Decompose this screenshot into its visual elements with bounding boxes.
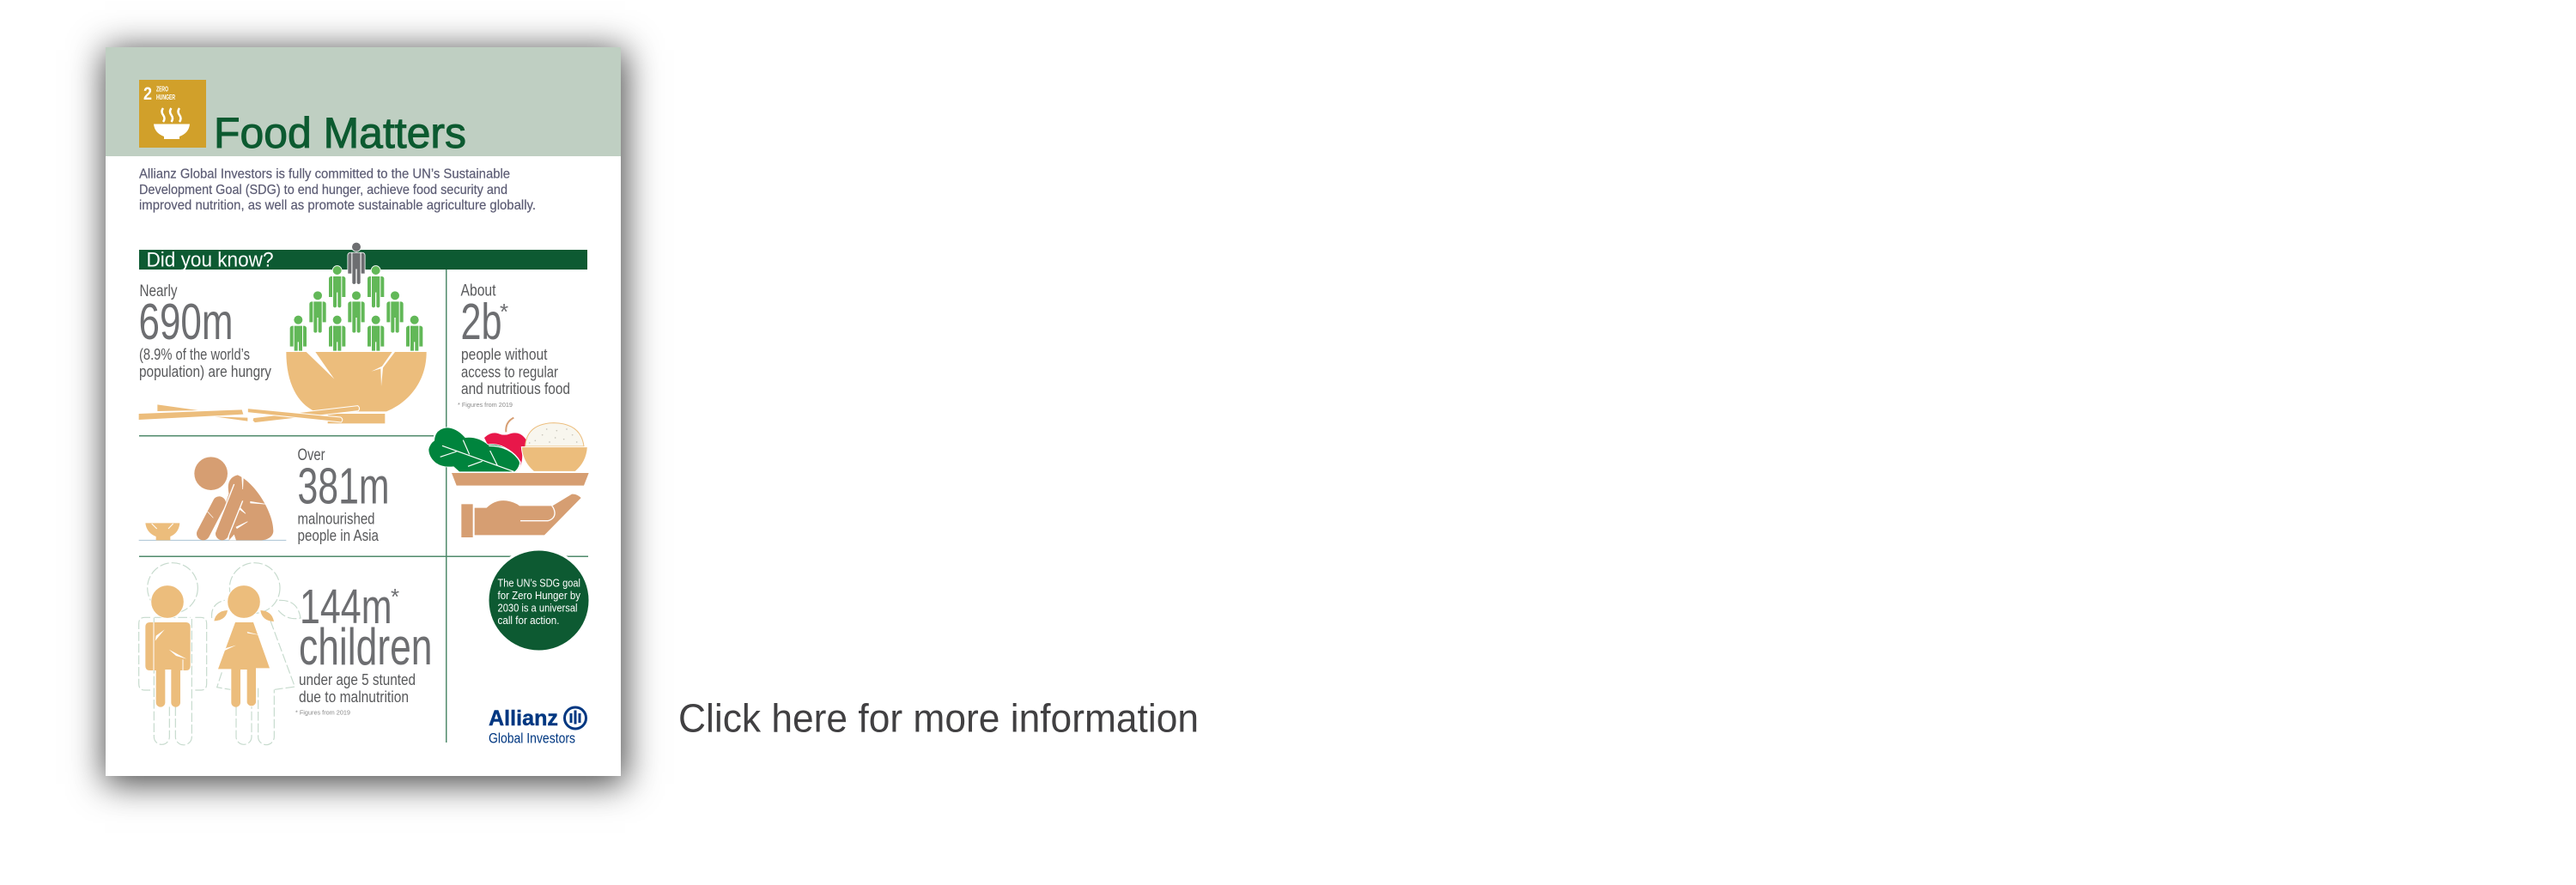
stat: 2b	[458, 282, 570, 409]
intro text: Allianz Global Investors is fully committed to the UN’s Sustainable	[139, 167, 510, 182]
stat: 690m	[139, 282, 272, 380]
stat: 2b: and nutritious food	[461, 379, 570, 397]
stat: 144m children: 144m	[300, 579, 392, 634]
callout circle: 2030 is a universal	[498, 603, 577, 615]
horizontal divider one	[139, 435, 434, 436]
stat: 2b: * Figures from 2019	[458, 401, 513, 409]
stat: 381m	[297, 446, 390, 544]
callout circle	[489, 551, 589, 651]
stat: 144m children: *	[391, 584, 399, 609]
icon: food on tray above open hand	[428, 418, 589, 537]
Allianz Global Investors logo: Global Investors	[489, 730, 575, 747]
stat: 144m children: * Figures from 2019	[295, 709, 350, 716]
title: Food Matters	[214, 109, 466, 157]
SDG 2 zero hunger badge: 2	[143, 84, 152, 104]
stat: 2b: people without	[461, 345, 548, 363]
intro text: improved nutrition, as well as promote sustainable agriculture globally.	[139, 198, 536, 213]
stat: 690m: population) are hungry	[139, 362, 272, 380]
stat: 690m: 690m	[139, 294, 234, 350]
stat: 144m children: under age 5 stunted	[299, 670, 416, 688]
horizontal divider two	[139, 556, 588, 557]
stat: 381m: 381m	[297, 458, 390, 515]
panel background with drop shadow	[106, 47, 621, 776]
stat: 690m: (8.9% of the world’s	[139, 345, 250, 363]
stat: 2b: About	[460, 282, 496, 300]
stat: 144m children: children	[299, 618, 433, 676]
header band	[106, 47, 621, 156]
link text: Click here for more information	[678, 695, 1199, 740]
stat: 2b: *	[500, 299, 508, 324]
vertical divider	[446, 270, 447, 743]
did you know banner: Did you know?	[146, 249, 273, 271]
stat: 144m children	[295, 579, 433, 716]
icon: stunted boy and girl with dashed full-height outlines	[139, 563, 301, 745]
stat: 381m: malnourished	[297, 510, 374, 527]
stat: 2b: access to regular	[461, 362, 558, 381]
callout circle: for Zero Hunger by	[498, 590, 581, 602]
intro text: Development Goal (SDG) to end hunger, achieve food security and	[139, 183, 507, 197]
callout circle: The UN’s SDG goal	[498, 577, 580, 589]
Allianz Global Investors logo	[489, 706, 586, 747]
stat: 144m children: due to malnutrition	[299, 688, 409, 706]
SDG 2 zero hunger badge: ZERO	[156, 86, 168, 93]
SDG 2 zero hunger badge: HUNGER	[156, 94, 175, 101]
SDG 2 zero hunger badge	[139, 80, 206, 148]
stat: 2b: 2b	[460, 294, 501, 350]
callout circle: call for action.	[498, 615, 560, 627]
stat: 381m: people in Asia	[297, 526, 380, 544]
Allianz Global Investors logo: Allianz	[489, 706, 558, 730]
intro text	[139, 167, 536, 213]
did you know banner	[139, 249, 587, 271]
stat: 381m: Over	[297, 446, 325, 464]
icon: people above cracked bowl with chopsticks	[139, 243, 429, 423]
icon: seated malnourished child with bowl	[139, 457, 286, 540]
stat: 690m: Nearly	[139, 282, 178, 300]
